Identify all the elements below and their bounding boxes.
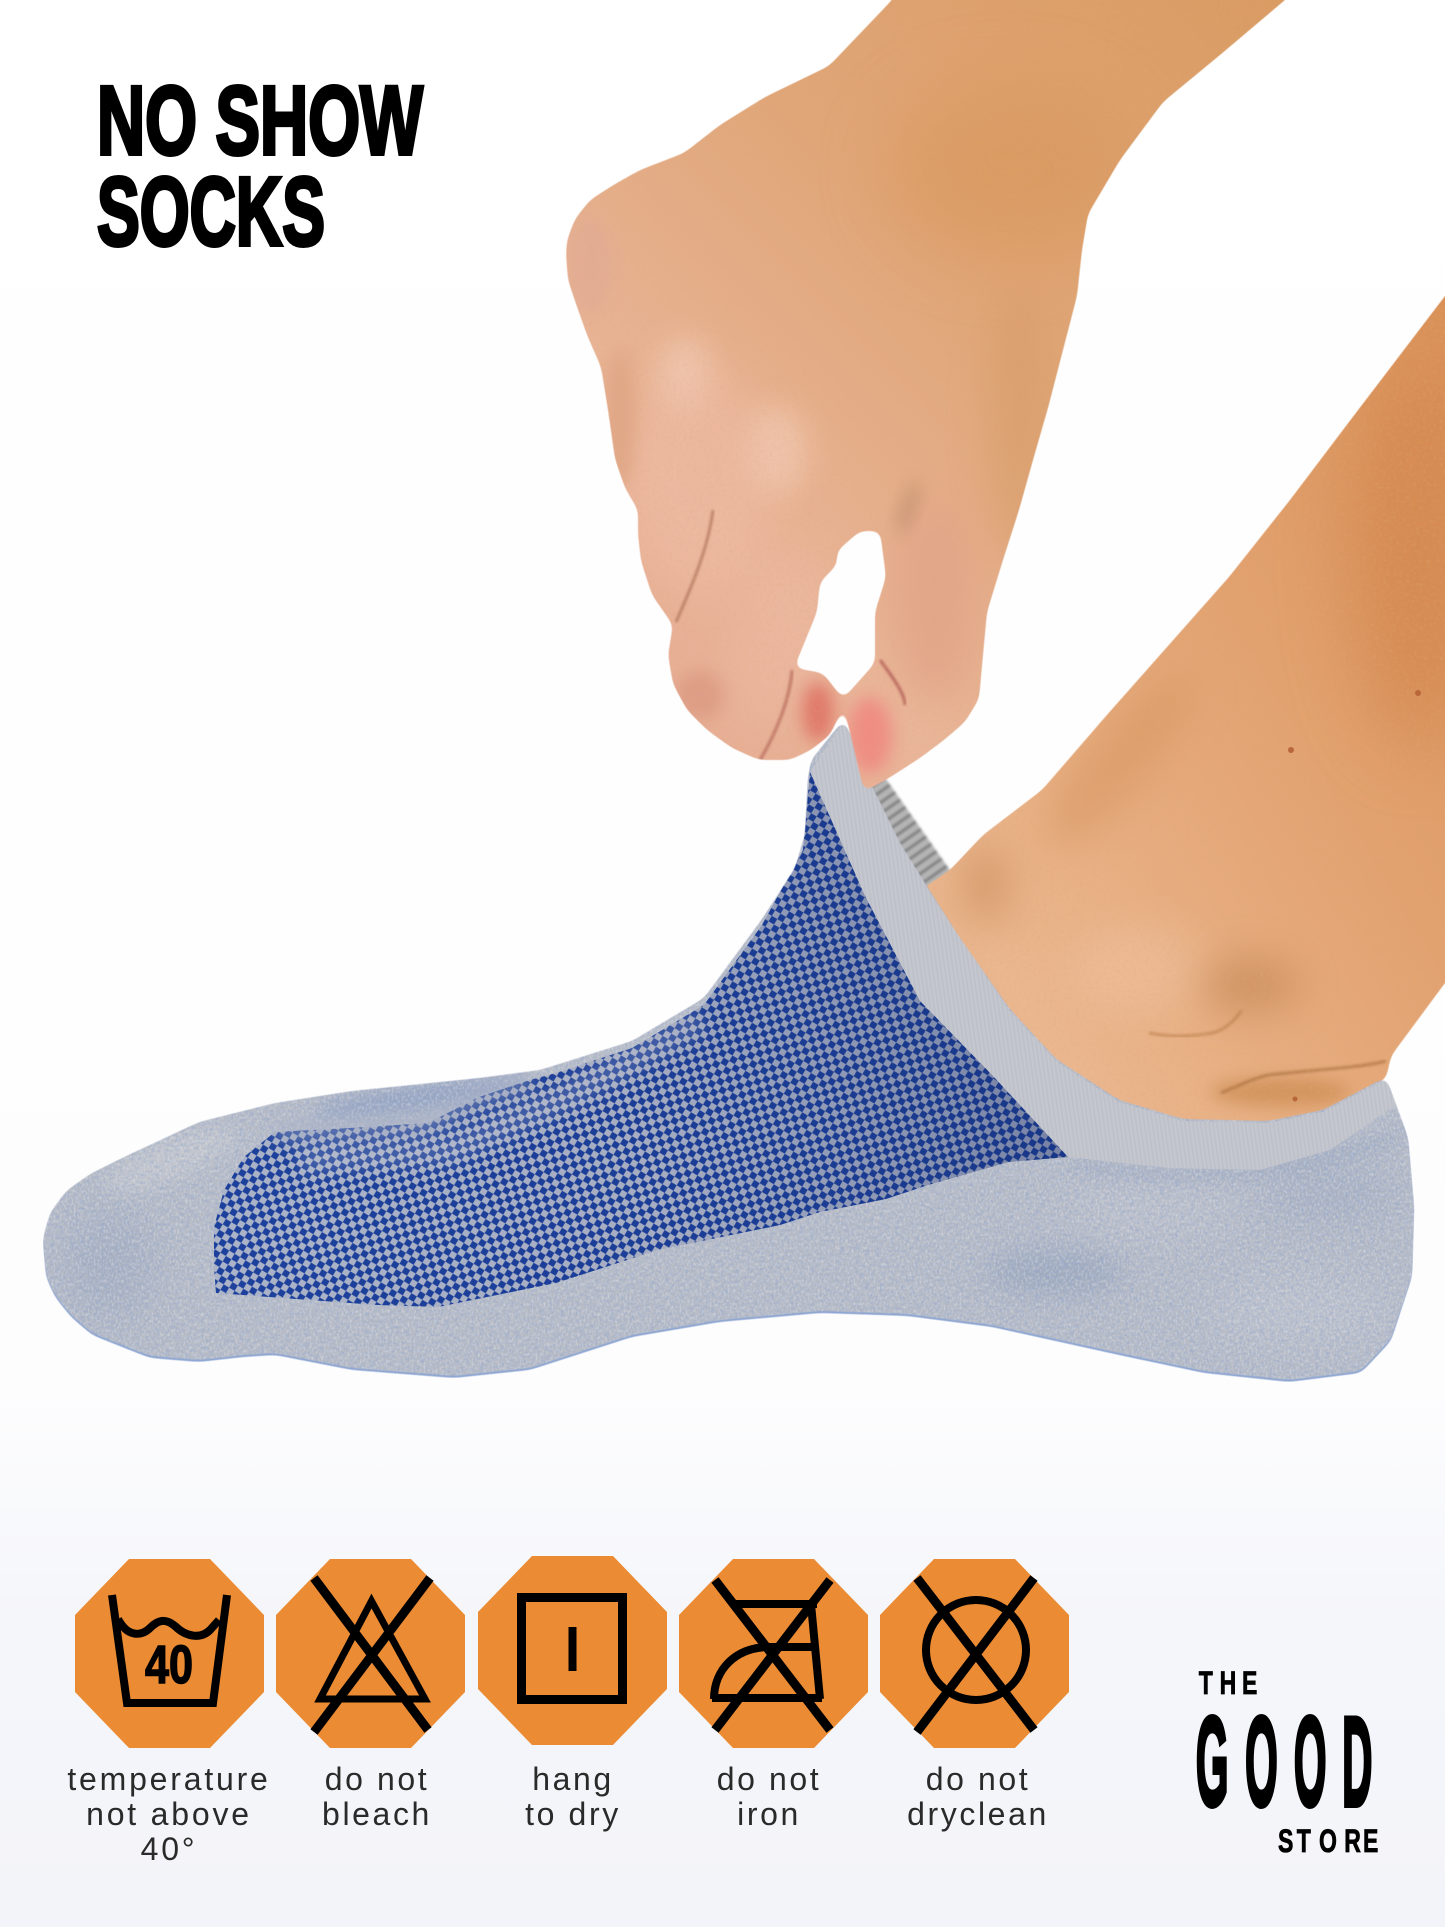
- label: temperature not above 40: temperature: [67, 1761, 271, 1797]
- label: do not bleach: do not: [325, 1761, 429, 1797]
- logo: The Good Store: THE: [1199, 1665, 1257, 1701]
- label: temperature not above 40: 40°: [141, 1831, 197, 1867]
- label: do not dryclean: dryclean: [907, 1796, 1049, 1832]
- label: do not dryclean: do not: [926, 1761, 1030, 1797]
- care icon: wash at 40: [75, 1559, 264, 1748]
- label: do not bleach: [322, 1761, 432, 1832]
- logo: The Good Store: STORE: [1278, 1823, 1378, 1859]
- title: SOCKS: [97, 157, 325, 266]
- title: NO SHOW: [97, 66, 423, 175]
- label: temperature not above 40: not above: [86, 1796, 252, 1832]
- sock: cuff and heel rim band: [810, 721, 1396, 1170]
- care icon: do not dryclean: [880, 1559, 1069, 1748]
- photo: sock body: [30, 700, 1430, 1400]
- care icon: hang to dry: [478, 1556, 667, 1745]
- label: do not iron: do not: [717, 1761, 821, 1797]
- title: [97, 66, 423, 266]
- label: hang to dry: [525, 1761, 621, 1832]
- label: hang to dry: hang: [532, 1761, 614, 1797]
- photo: back of sock cuff: [860, 770, 952, 900]
- label: do not dryclean: [907, 1761, 1049, 1832]
- label: do not iron: iron: [737, 1796, 801, 1832]
- care icon: wash at 40: 40: [145, 1635, 193, 1695]
- label: do not iron: [717, 1761, 821, 1832]
- photo: hand pulling sock: [566, 0, 1286, 788]
- care icon: do not iron: [679, 1559, 868, 1748]
- photo: leg and heel: [926, 296, 1445, 1122]
- label: hang to dry: to dry: [525, 1796, 621, 1832]
- logo: The Good Store: GOOD: [1196, 1691, 1372, 1834]
- label: temperature not above 40: [67, 1761, 271, 1867]
- sock: mesh panel: [214, 772, 1068, 1307]
- photo: sock sole edge: [43, 764, 1414, 1382]
- label: do not bleach: bleach: [322, 1796, 432, 1832]
- care icon: do not bleach: [276, 1559, 465, 1748]
